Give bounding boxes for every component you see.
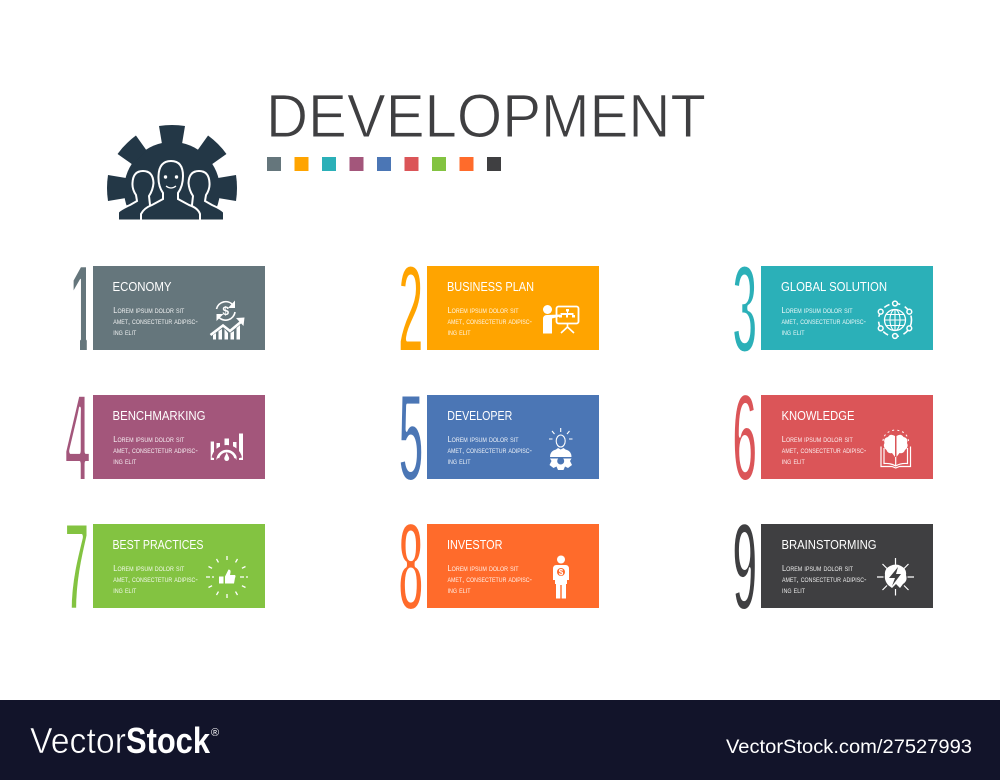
body text: amet, consectetur adipisc- xyxy=(113,445,198,455)
body text: Lorem ipsum dolor sit xyxy=(448,563,519,573)
heading: BUSINESS PLAN xyxy=(447,279,534,294)
numeral 3: 3 xyxy=(732,239,758,381)
icon: investor figure: $ xyxy=(559,568,564,577)
card panel xyxy=(427,395,599,479)
footer image id: VectorStock.com/27527993 xyxy=(726,737,972,758)
numeral 7: 7 xyxy=(64,497,90,639)
icon: thumbs up with rays xyxy=(206,556,248,598)
icon: networked globe xyxy=(878,301,912,338)
footer logo: Stock xyxy=(126,720,211,761)
footer logo: Vector xyxy=(30,720,126,761)
heading: KNOWLEDGE xyxy=(782,408,855,423)
numeral 9: 9 xyxy=(732,497,758,639)
card panel xyxy=(761,395,933,479)
numeral 5: 5 xyxy=(398,368,424,510)
body text: amet, consectetur adipisc- xyxy=(448,574,532,584)
body text: ing elit xyxy=(113,327,137,337)
body text: ing elit xyxy=(448,456,471,466)
item 6: knowledge xyxy=(732,368,933,510)
card panel xyxy=(761,524,933,608)
body text: Lorem ipsum dolor sit xyxy=(113,305,185,315)
body text: amet, consectetur adipisc- xyxy=(782,574,867,584)
card panel xyxy=(93,266,265,350)
body text: ing elit xyxy=(782,456,805,466)
body text: amet, consectetur adipisc- xyxy=(782,316,866,326)
body text xyxy=(782,305,866,337)
footer logo xyxy=(30,720,219,761)
body text: Lorem ipsum dolor sit xyxy=(782,305,853,315)
item 9: brainstorming xyxy=(732,497,933,639)
body text: ing elit xyxy=(782,327,805,337)
body text: ing elit xyxy=(448,327,471,337)
item 4: benchmarking xyxy=(64,368,265,510)
body text xyxy=(113,434,198,466)
card panel xyxy=(761,266,933,350)
heading: BEST PRACTICES xyxy=(112,537,204,552)
numeral 8: 8 xyxy=(398,497,424,639)
body text: amet, consectetur adipisc- xyxy=(782,445,866,455)
body text: Lorem ipsum dolor sit xyxy=(113,563,185,573)
numeral 2: 2 xyxy=(398,239,424,381)
icon: brain over book xyxy=(881,430,910,468)
card panel xyxy=(93,524,265,608)
card panel xyxy=(427,266,599,350)
title: DEVELOPMENT xyxy=(266,82,706,150)
body text xyxy=(448,434,532,466)
item 1: economy xyxy=(66,240,265,378)
footer logo: ® xyxy=(211,727,219,739)
icon: investor figure xyxy=(553,556,569,598)
body text xyxy=(448,305,532,337)
body text: amet, consectetur adipisc- xyxy=(113,316,198,326)
item 2: business plan xyxy=(398,239,599,381)
icon: money growth xyxy=(210,300,244,340)
body text: ing elit xyxy=(113,585,137,595)
card panel xyxy=(93,395,265,479)
heading: GLOBAL SOLUTION xyxy=(781,279,887,294)
body text: ing elit xyxy=(448,585,471,595)
heading: ECONOMY xyxy=(112,279,172,294)
body text: amet, consectetur adipisc- xyxy=(113,574,198,584)
icon: benchmark gauge xyxy=(211,434,243,461)
numeral 1: 1 xyxy=(70,240,95,378)
body text: Lorem ipsum dolor sit xyxy=(113,434,185,444)
item 7: best practices xyxy=(64,497,265,639)
heading: DEVELOPER xyxy=(447,408,512,423)
icon: developer with idea and gear xyxy=(549,428,572,470)
icon: brain with lightning xyxy=(877,558,914,596)
body text: amet, consectetur adipisc- xyxy=(448,445,532,455)
body text: ing elit xyxy=(113,456,137,466)
numeral 6: 6 xyxy=(732,368,758,510)
body text: Lorem ipsum dolor sit xyxy=(448,434,519,444)
icon: team in gear xyxy=(107,125,237,220)
footer band xyxy=(0,700,1000,780)
item 8: investor xyxy=(398,497,599,639)
icon: presentation xyxy=(543,305,578,334)
body text xyxy=(782,434,866,466)
heading: INVESTOR xyxy=(447,537,502,552)
body text: amet, consectetur adipisc- xyxy=(448,316,532,326)
card panel xyxy=(427,524,599,608)
heading: BRAINSTORMING xyxy=(782,537,876,552)
colour swatches xyxy=(267,157,501,171)
item 3: global solution xyxy=(732,239,933,381)
body text: Lorem ipsum dolor sit xyxy=(448,305,519,315)
body text xyxy=(448,563,532,595)
body text: ing elit xyxy=(782,585,805,595)
body text xyxy=(113,563,198,595)
item 5: developer xyxy=(398,368,599,510)
heading: BENCHMARKING xyxy=(112,408,206,423)
body text xyxy=(782,563,867,595)
numeral base mask xyxy=(66,332,93,352)
icon: money growth: $ xyxy=(222,304,229,318)
body text: Lorem ipsum dolor sit xyxy=(782,434,853,444)
numeral 4: 4 xyxy=(64,368,90,510)
body text: Lorem ipsum dolor sit xyxy=(782,563,853,573)
body text xyxy=(113,305,198,337)
